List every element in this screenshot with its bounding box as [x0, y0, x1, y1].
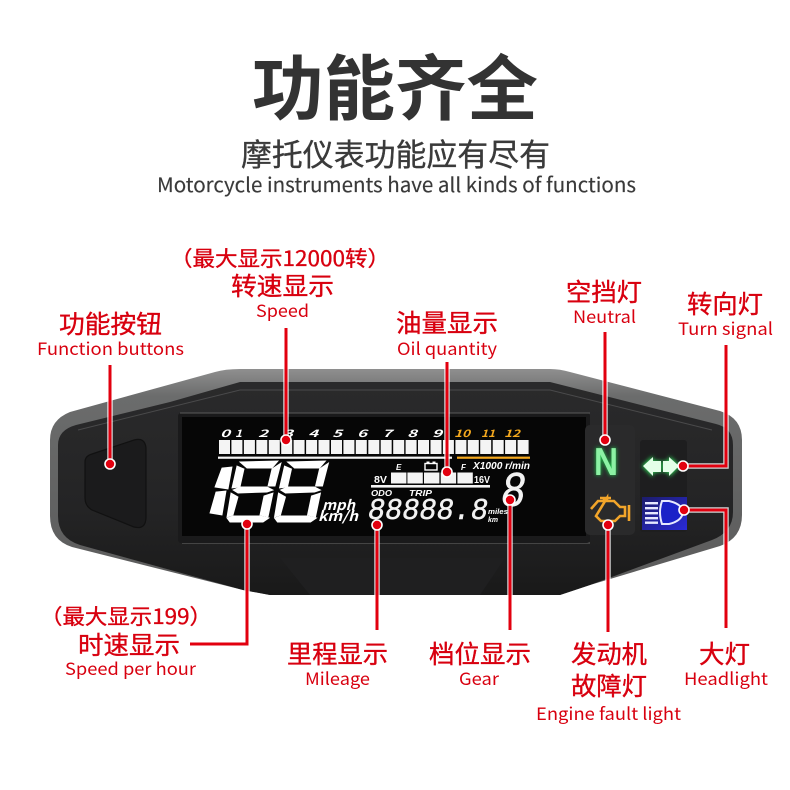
callout: oil quantity: Oil quantity [397, 335, 497, 360]
subtitle english: Motorcycle instruments have all kinds of functions [157, 169, 636, 198]
callout: speed tachometer: Speed [256, 297, 309, 322]
icon: neutral N: N [594, 441, 618, 484]
tachometer scale numbers: 11 [481, 425, 495, 440]
fuel gauge: F [461, 463, 467, 472]
callout: mileage: Mileage [305, 665, 370, 690]
odometer: miles [488, 509, 508, 516]
speed digits 188 [210, 461, 328, 522]
indicator panels [585, 425, 687, 535]
lcd screen [178, 413, 590, 543]
tachometer scale numbers: 1 [235, 425, 242, 440]
callout: function buttons: 功能按钮 [59, 305, 162, 341]
callout: function buttons: Function buttons [37, 335, 184, 360]
callout: headlight [679, 505, 769, 690]
tachometer scale numbers: 5 [332, 425, 344, 440]
tachometer scale numbers: 2 [258, 425, 270, 440]
callout: headlight: Headlight [684, 665, 769, 690]
speed unit labels: mph [322, 495, 356, 515]
callout: headlight: 大灯 [699, 635, 750, 671]
odometer: ODO [371, 488, 392, 498]
callout: engine fault light: 发动机 [571, 635, 647, 671]
callout: speed per hour: Speed per hour [65, 655, 196, 680]
callout: engine fault light: 故障灯 [571, 667, 647, 703]
fuel gauge: E [396, 463, 402, 472]
fuel gauge [371, 461, 530, 488]
callout: speed per hour: （最大显示199） [40, 601, 212, 631]
tachometer scale numbers: 7 [382, 425, 396, 440]
odometer: km [488, 517, 498, 524]
callout: neutral [566, 273, 642, 445]
callout: turn signal [678, 285, 773, 471]
dashboard instrument body [50, 369, 742, 595]
callout: function buttons [37, 305, 184, 469]
speed unit labels: km/h [318, 506, 359, 526]
callout: gear: Gear [459, 665, 499, 690]
subtitle chinese: 摩托仪表功能应有尽有 [241, 130, 550, 175]
tachometer scale numbers [220, 425, 521, 440]
tachometer scale numbers: 6 [357, 425, 371, 440]
tachometer scale numbers: 0 [220, 425, 234, 440]
tachometer scale numbers: 12 [504, 425, 521, 440]
odometer: 88888.8 [368, 494, 488, 529]
fuel gauge: X1000 r/min [472, 461, 530, 472]
callout: turn signal: Turn signal [678, 315, 773, 340]
icon: headlight [642, 497, 687, 530]
tachometer scale numbers: 4 [308, 425, 320, 440]
tachometer scale numbers: 10 [454, 425, 473, 440]
callout: turn signal: 转向灯 [687, 285, 763, 321]
icon: neutral N: N [594, 441, 618, 484]
callout: engine fault light [536, 520, 682, 725]
icon: turn signal arrows [642, 456, 680, 477]
callout: engine fault light: Engine fault light [536, 700, 682, 725]
callout: neutral: 空挡灯 [566, 273, 642, 309]
function button [85, 439, 146, 528]
gear digit: 8 [501, 465, 526, 522]
speed unit labels [318, 495, 359, 526]
callout: oil quantity [396, 304, 498, 477]
callout: gear: 档位显示 [429, 635, 531, 671]
callout: oil quantity: 油量显示 [396, 304, 498, 340]
callout: speed per hour [40, 519, 252, 680]
tachometer bar [218, 440, 530, 459]
tachometer scale numbers: 3 [283, 425, 295, 440]
fuel gauge: 16V [474, 475, 490, 486]
fuel gauge: 8V [374, 475, 387, 486]
callout: speed per hour: 时速显示 [78, 626, 180, 662]
callout: neutral: Neutral [573, 303, 636, 328]
tachometer scale numbers: 8 [407, 425, 419, 440]
title: 功能齐全 [252, 33, 538, 135]
odometer: TRIP [409, 488, 432, 498]
callout: gear [429, 495, 531, 690]
callout: mileage [287, 520, 388, 690]
icon: engine fault [591, 498, 629, 521]
callout: speed tachometer: 转速显示 [231, 267, 334, 303]
callout: speed tachometer [170, 243, 390, 445]
callout: mileage: 里程显示 [287, 635, 388, 671]
tachometer scale numbers: 9 [432, 425, 444, 440]
callout: speed tachometer: （最大显示12000转） [170, 243, 390, 273]
